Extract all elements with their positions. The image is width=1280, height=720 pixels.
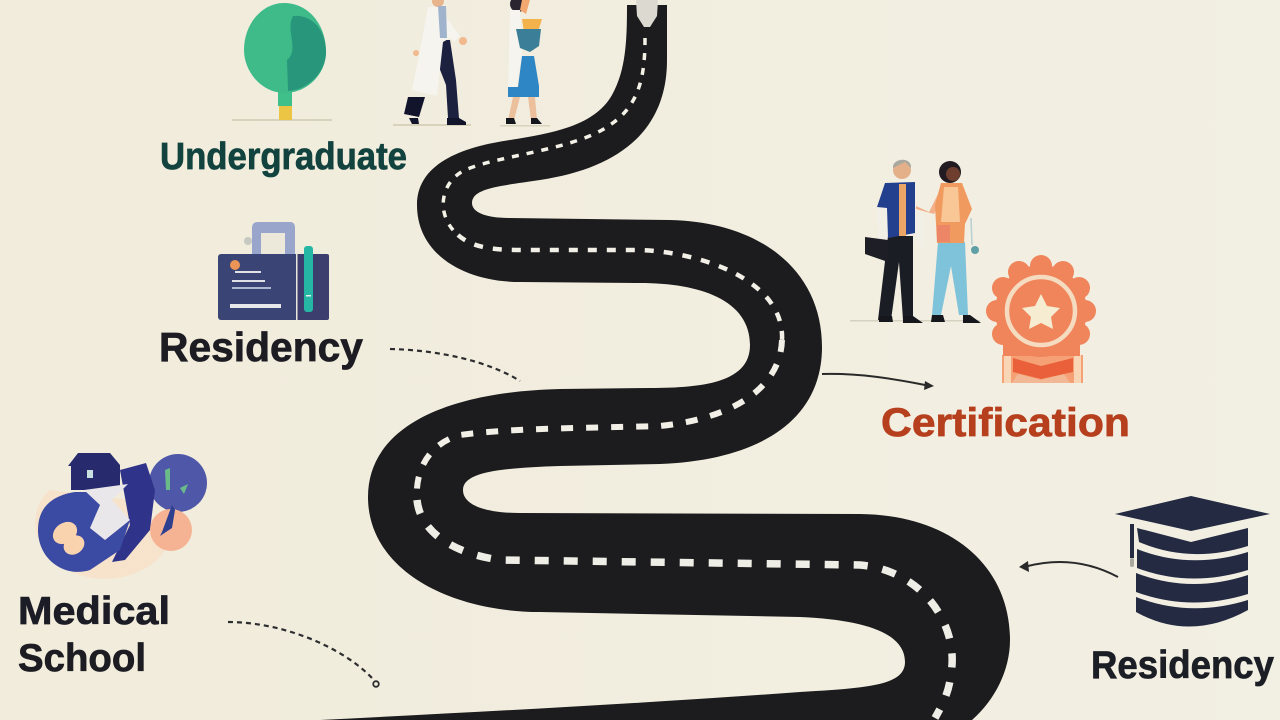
dashed connector: medical school to road (228, 622, 379, 687)
figure: student with books (500, 0, 550, 126)
heading: Residency left: Residency (159, 324, 363, 370)
road centre dashes, second section (458, 235, 782, 340)
dashed connector: residency to road (390, 349, 520, 381)
heading: Medical School (18, 590, 170, 680)
arrow: graduation cap to road (1019, 561, 1118, 577)
figure: doctor with bag (393, 0, 471, 126)
icon: certification badge (986, 255, 1096, 383)
heading: Certification: Certification (881, 401, 1130, 445)
icon: briefcase (218, 222, 329, 320)
arrow: road to certification (822, 374, 934, 390)
icon: medical school illustration (35, 453, 207, 579)
icon: tree (232, 3, 332, 121)
icon: graduation cap (1115, 496, 1270, 627)
winding road (320, 0, 1010, 720)
heading: Undergraduate: Undergraduate (160, 136, 407, 178)
road centre dashes, upper section (443, 38, 645, 235)
figures: two professionals (850, 160, 981, 323)
heading: Medical School: Medical (18, 590, 170, 633)
heading: Medical School: School (18, 637, 146, 680)
road centre dashes, third section (417, 340, 782, 500)
road centre dashes, lower section (417, 500, 952, 718)
road top lamp (636, 0, 658, 27)
